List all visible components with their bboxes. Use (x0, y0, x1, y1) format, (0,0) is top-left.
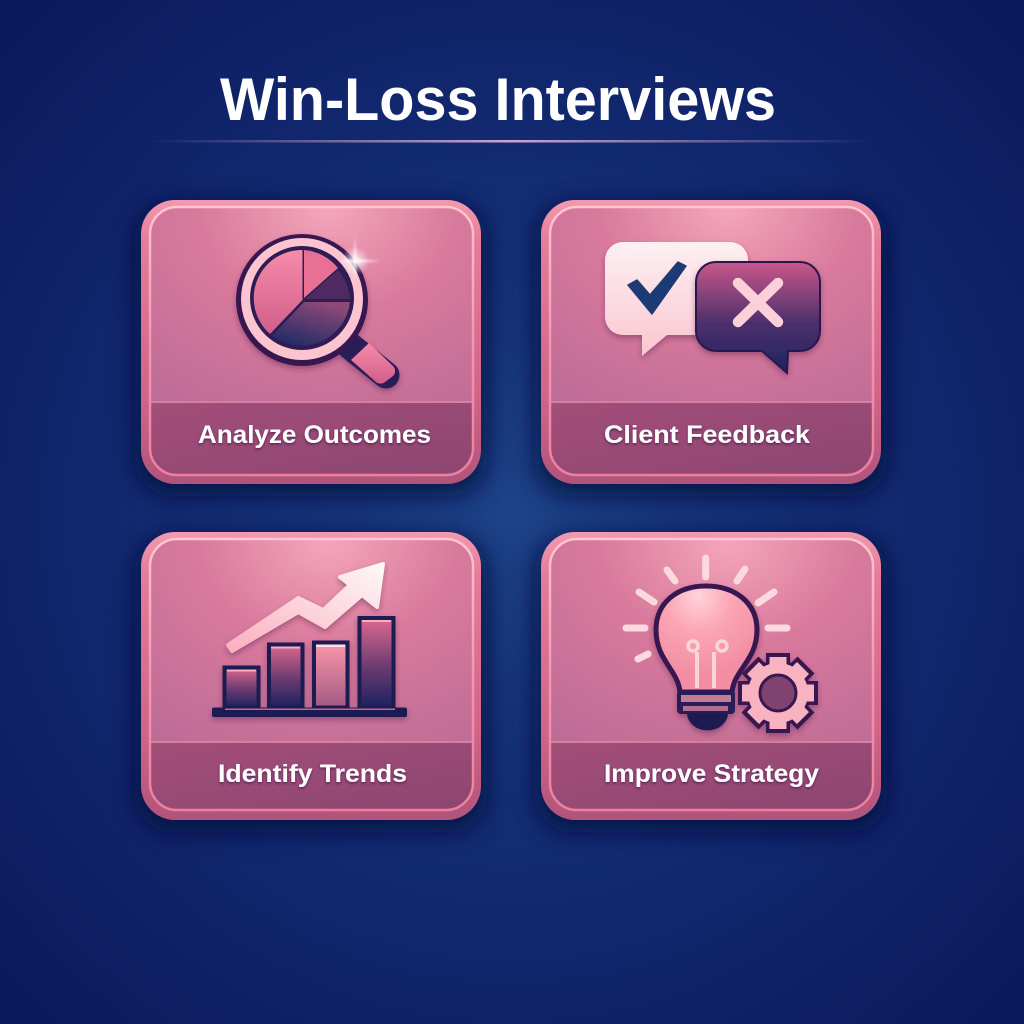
label: analyze outcomes: Analyze Outcomes (198, 421, 431, 449)
icon: light rays (626, 558, 787, 659)
label: improve strategy: Improve Strategy (604, 760, 819, 788)
panel: identify trends (135, 532, 487, 832)
icon: gear (738, 653, 818, 733)
icon: light speech bubble with check (605, 242, 748, 356)
icon: magnifying glass with pie chart (236, 234, 395, 384)
icon: dark speech bubble with cross (696, 262, 820, 373)
icon: light bulb (656, 586, 757, 730)
label: client feedback: Client Feedback (604, 421, 810, 449)
panel: client feedback (535, 200, 887, 496)
panel: improve strategy (535, 532, 887, 832)
icon: sparkle (338, 236, 380, 280)
chart: bar chart (212, 618, 407, 717)
label: identify trends: Identify Trends (218, 760, 407, 788)
icon: rising arrow (228, 564, 383, 651)
title: Win-Loss Interviews (220, 66, 776, 133)
panel: analyze outcomes (135, 200, 487, 496)
